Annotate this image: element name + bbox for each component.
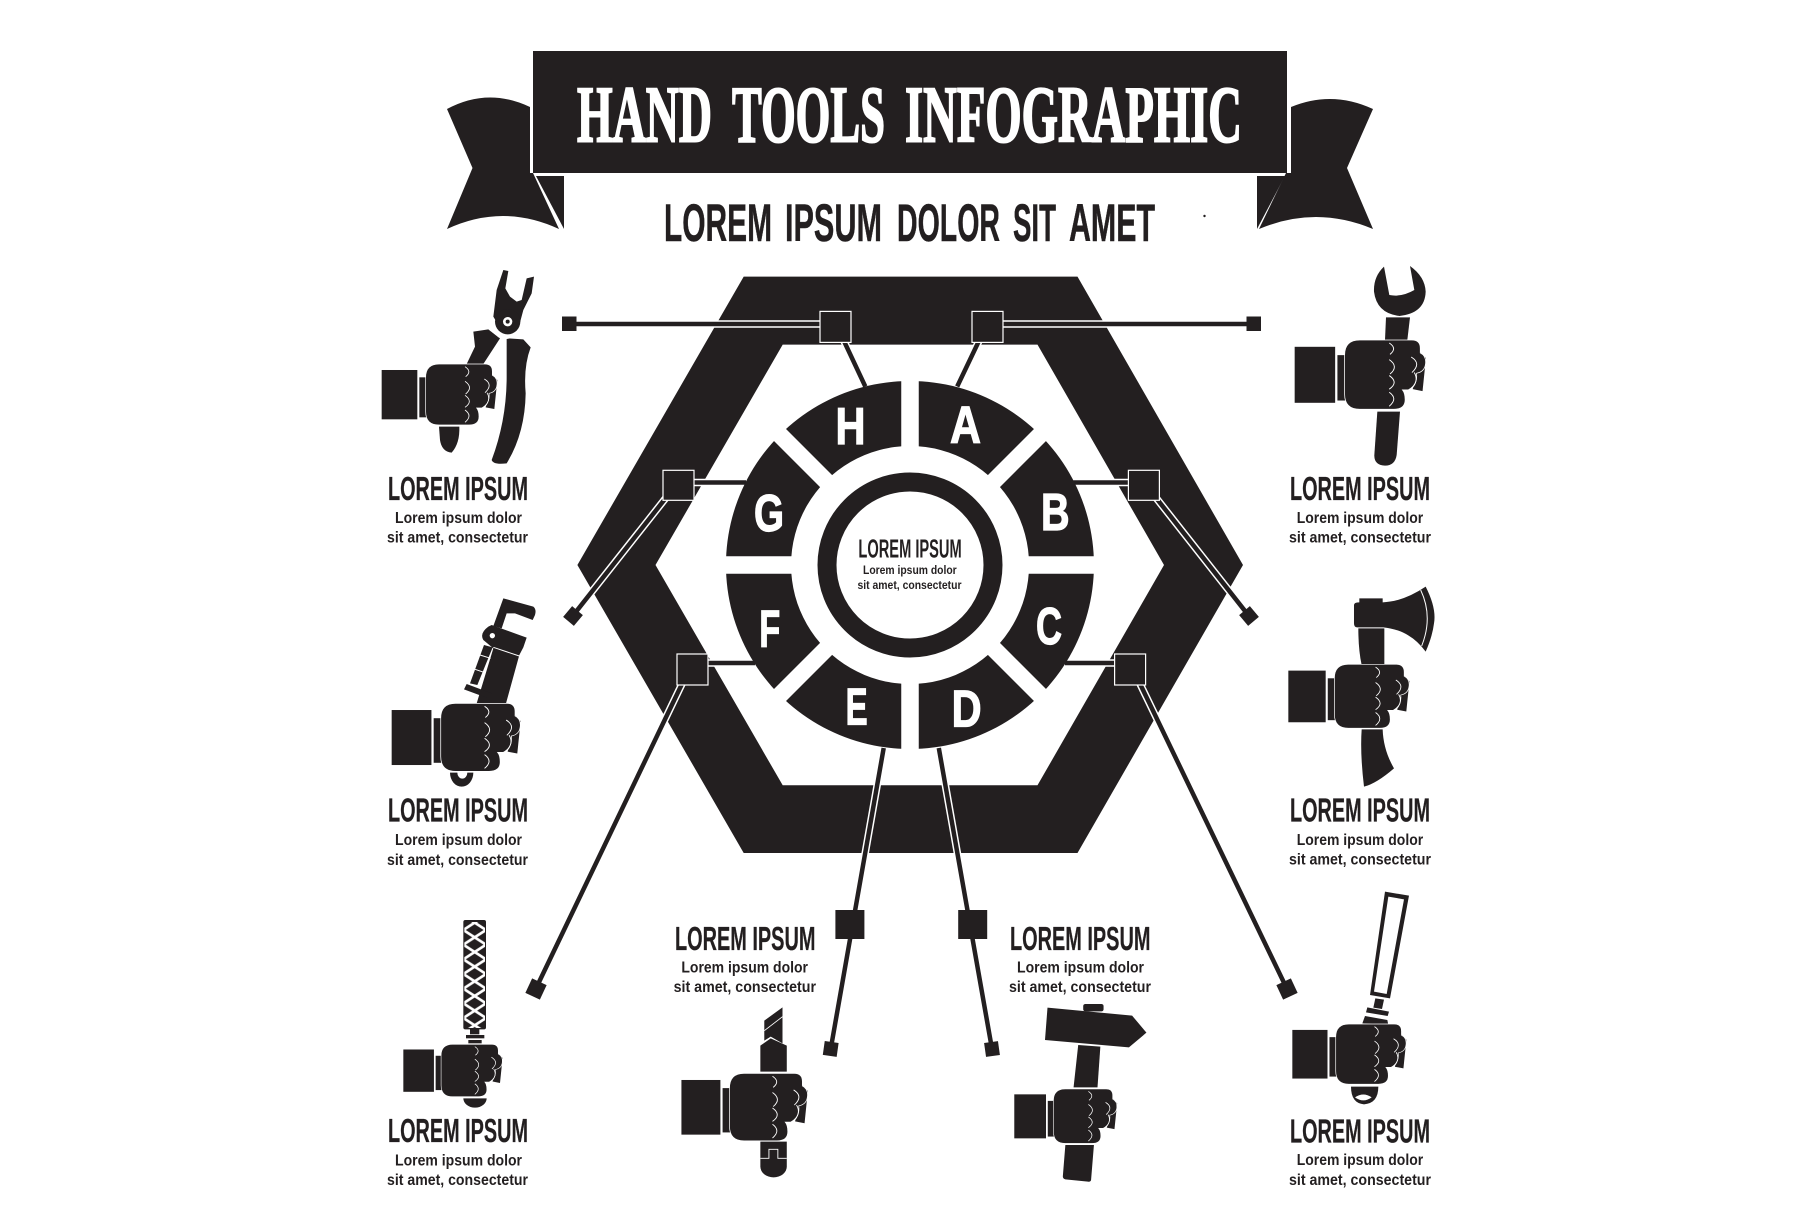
segment letters: A [950, 397, 981, 455]
text block [674, 960, 816, 996]
panel: pipe wrench [387, 598, 536, 869]
heading: LOREM IPSUM [1290, 793, 1430, 830]
text block: sit amet, consectetur [1289, 530, 1431, 547]
title banner [447, 51, 1373, 229]
text block: Lorem ipsum dolor [1297, 1152, 1423, 1169]
panel: spanner [1289, 266, 1431, 547]
banner rectangle [533, 51, 1287, 173]
icon: hand with pipe wrench [392, 598, 536, 787]
centre text [858, 534, 962, 592]
title text: TOOLS [732, 72, 885, 160]
connector lines [525, 311, 1298, 1057]
heading: LOREM IPSUM [388, 793, 528, 830]
text block [387, 510, 528, 547]
text block [1009, 960, 1151, 996]
right ribbon tail [1257, 99, 1373, 229]
centre text: LOREM IPSUM [858, 534, 962, 564]
text block: sit amet, consectetur [1289, 851, 1431, 868]
heading: LOREM IPSUM [1290, 471, 1430, 508]
text block: Lorem ipsum dolor [395, 510, 522, 527]
text block: sit amet, consectetur [674, 979, 816, 996]
subtitle: IPSUM [785, 194, 882, 253]
text block: sit amet, consectetur [387, 530, 528, 547]
text block [387, 1153, 528, 1189]
text block: Lorem ipsum dolor [395, 832, 522, 849]
heading: LOREM IPSUM [388, 1113, 528, 1150]
segment letters [754, 397, 1070, 738]
panel: pliers [382, 270, 534, 547]
segment letters: F [759, 601, 780, 659]
segmented ring A-H [715, 370, 1105, 760]
left ribbon tail [447, 97, 564, 229]
panel: hammer [1009, 921, 1151, 1182]
subtitle: DOLOR [897, 194, 1000, 253]
icon: hand with axe [1288, 587, 1435, 787]
centre text: Lorem ipsum dolor [863, 565, 957, 577]
text block: Lorem ipsum dolor [681, 960, 808, 977]
hexagon frame [577, 277, 1243, 853]
text block: sit amet, consectetur [387, 852, 528, 869]
icon: hand with spanner [1295, 266, 1426, 466]
text block: Lorem ipsum dolor [1017, 960, 1144, 977]
panel: utility knife [674, 921, 816, 1177]
segment letters: B [1041, 484, 1070, 542]
centre text: sit amet, consectetur [858, 580, 962, 592]
subtitle: LOREM [664, 194, 772, 253]
heading: LOREM IPSUM [675, 921, 815, 958]
subtitle: SIT [1013, 194, 1056, 253]
subtitle [664, 194, 1155, 253]
segment letters: G [754, 485, 784, 543]
icon: hand with hammer [1014, 1004, 1146, 1182]
text block: sit amet, consectetur [387, 1172, 528, 1189]
heading: LOREM IPSUM [388, 471, 528, 508]
segment letters: C [1036, 598, 1062, 656]
panel: file [387, 920, 528, 1189]
title text: INFOGRAPHIC [905, 72, 1242, 160]
text block [1289, 1152, 1431, 1189]
icon: hand with utility knife [681, 1007, 808, 1177]
panel: chisel [1289, 892, 1431, 1189]
text block: sit amet, consectetur [1009, 979, 1151, 996]
heading: LOREM IPSUM [1290, 1113, 1430, 1150]
subtitle: AMET [1069, 194, 1155, 253]
segment letters: D [952, 680, 982, 738]
title text: HAND [577, 72, 712, 160]
segment letters: E [846, 678, 868, 736]
text block [387, 832, 528, 869]
text block [1289, 832, 1431, 868]
title text [577, 72, 1242, 160]
text block [1289, 510, 1431, 547]
icon: hand with file [403, 920, 503, 1108]
text block: Lorem ipsum dolor [395, 1153, 522, 1170]
icon: hand with chisel [1292, 892, 1409, 1104]
text block: sit amet, consectetur [1289, 1172, 1431, 1189]
panel: axe [1288, 587, 1435, 868]
text block: Lorem ipsum dolor [1297, 832, 1423, 849]
text block: Lorem ipsum dolor [1297, 510, 1423, 527]
heading: LOREM IPSUM [1010, 921, 1150, 958]
segment letters: H [836, 398, 866, 456]
icon: hand with pliers [382, 270, 534, 464]
centre circle [827, 482, 993, 648]
